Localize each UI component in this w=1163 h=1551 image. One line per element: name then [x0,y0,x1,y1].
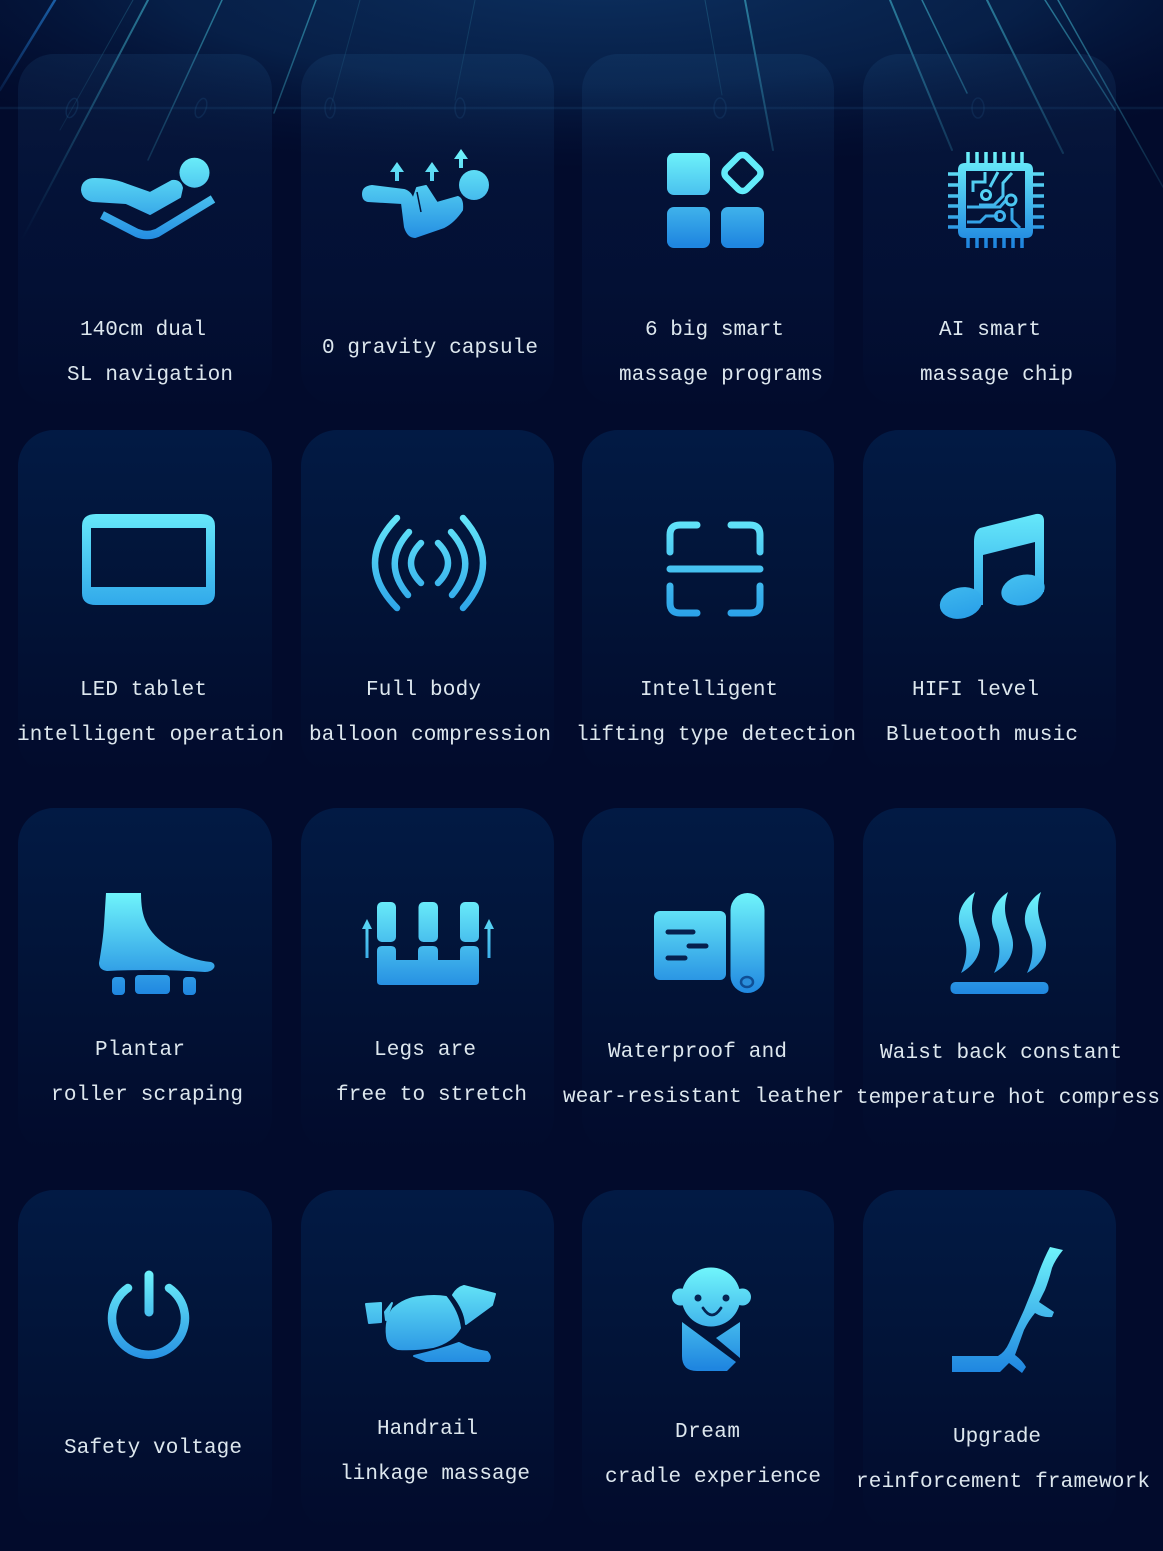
text: Handrail linkage massage [340,1418,530,1486]
text: 6 big smart massage programs: 6 big smart [645,319,784,342]
text: Upgrade reinforcement framework: Upgrade [953,1426,1041,1449]
icon: reinforced frame [952,1247,1063,1373]
text: Plantar roller scraping: roller scraping [51,1084,243,1107]
text: 6 big smart massage programs: massage programs [619,364,823,387]
text: 0 gravity capsule: 0 gravity capsule [322,337,538,360]
panel: LED tablet intelligent operation [17,430,284,775]
text: Waist back constant temperature hot compress: temperature hot compress [856,1087,1160,1110]
text: Legs are free to stretch: Legs are [374,1039,476,1062]
text: Dream cradle experience [605,1421,821,1489]
text: 6 big smart massage programs [619,319,823,387]
icon: tablet [82,514,215,605]
text: HIFI level Bluetooth music: HIFI level [912,679,1039,702]
panel: Waterproof and wear-resistant leather [563,808,844,1153]
text: LED tablet intelligent operation: intelligent operation [17,724,284,747]
icon: reclined body on rail [82,158,213,235]
panel: 140cm dual SL navigation [18,54,272,406]
text: Plantar roller scraping: Plantar [95,1039,185,1062]
panel: Handrail linkage massage [301,1190,554,1532]
icon: AI chip [948,152,1044,248]
text: Waist back constant temperature hot compress [856,1042,1160,1110]
icon: music note [936,514,1048,623]
panel: Full body balloon compression [301,430,554,775]
text: Legs are free to stretch: free to stretch [336,1084,527,1107]
text: Waterproof and wear-resistant leather: wear-resistant leather [563,1086,844,1109]
text: Handrail linkage massage: linkage massage [340,1463,530,1486]
panel: 6 big smart massage programs [582,54,834,406]
text: Full body balloon compression: balloon compression [309,724,551,747]
text: AI smart massage chip: massage chip [920,364,1073,387]
text: LED tablet intelligent operation: LED tablet [80,679,207,702]
text: AI smart massage chip [920,319,1073,387]
text: Safety voltage: Safety voltage [64,1437,242,1460]
icon: leg rests with arrows [362,902,494,985]
text: Plantar roller scraping [51,1039,243,1107]
text: Upgrade reinforcement framework [856,1426,1150,1494]
text: 140cm dual SL navigation: 140cm dual [80,319,206,342]
icon: swaddled baby [672,1268,751,1371]
panel: Dream cradle experience [582,1190,834,1532]
panel: HIFI level Bluetooth music [863,430,1116,775]
icon: leather roll and swatch [654,893,764,993]
icon: scan frame [670,525,760,613]
top glow [0,0,1163,220]
panel: Safety voltage [18,1190,272,1532]
text: LED tablet intelligent operation [17,679,284,747]
text: Waist back constant temperature hot compress: Waist back constant [880,1042,1122,1065]
text: HIFI level Bluetooth music: Bluetooth music [886,724,1078,747]
icon: massage chair [366,1286,495,1361]
text: Intelligent lifting type detection: Intelligent [640,679,778,702]
text: 140cm dual SL navigation: SL navigation [67,364,233,387]
text: Intelligent lifting type detection [576,679,856,747]
text: Upgrade reinforcement framework: reinforcement framework [856,1471,1150,1494]
icon: heat waves [950,892,1048,994]
panel: Waist back constant temperature hot compress [856,808,1160,1153]
icon: radiating arcs [375,518,483,608]
text: Dream cradle experience: cradle experience [605,1466,821,1489]
text: Handrail linkage massage: Handrail [377,1418,478,1441]
panel: Intelligent lifting type detection [576,430,856,775]
panel: Legs are free to stretch [301,808,554,1153]
text: HIFI level Bluetooth music [886,679,1078,747]
background light rays [0,0,1163,247]
icon: power symbol [112,1275,185,1355]
panel: Plantar roller scraping [18,808,272,1153]
text: AI smart massage chip: AI smart [939,319,1041,342]
panel: 0 gravity capsule [301,54,554,406]
text: Dream cradle experience: Dream [675,1421,740,1444]
text: Waterproof and wear-resistant leather [563,1041,844,1109]
text: Intelligent lifting type detection: lifting type detection [576,724,856,747]
icon: foot on rollers [99,893,215,995]
icon: app grid [667,152,764,248]
panel: AI smart massage chip [863,54,1116,406]
icon: zero gravity body with arrows [363,149,489,237]
text: Legs are free to stretch [336,1039,527,1107]
text: Full body balloon compression [309,679,551,747]
panel: Upgrade reinforcement framework [856,1190,1150,1532]
text: 140cm dual SL navigation [67,319,233,387]
text: Waterproof and wear-resistant leather: Waterproof and [608,1041,787,1064]
text: Full body balloon compression: Full body [366,679,481,702]
